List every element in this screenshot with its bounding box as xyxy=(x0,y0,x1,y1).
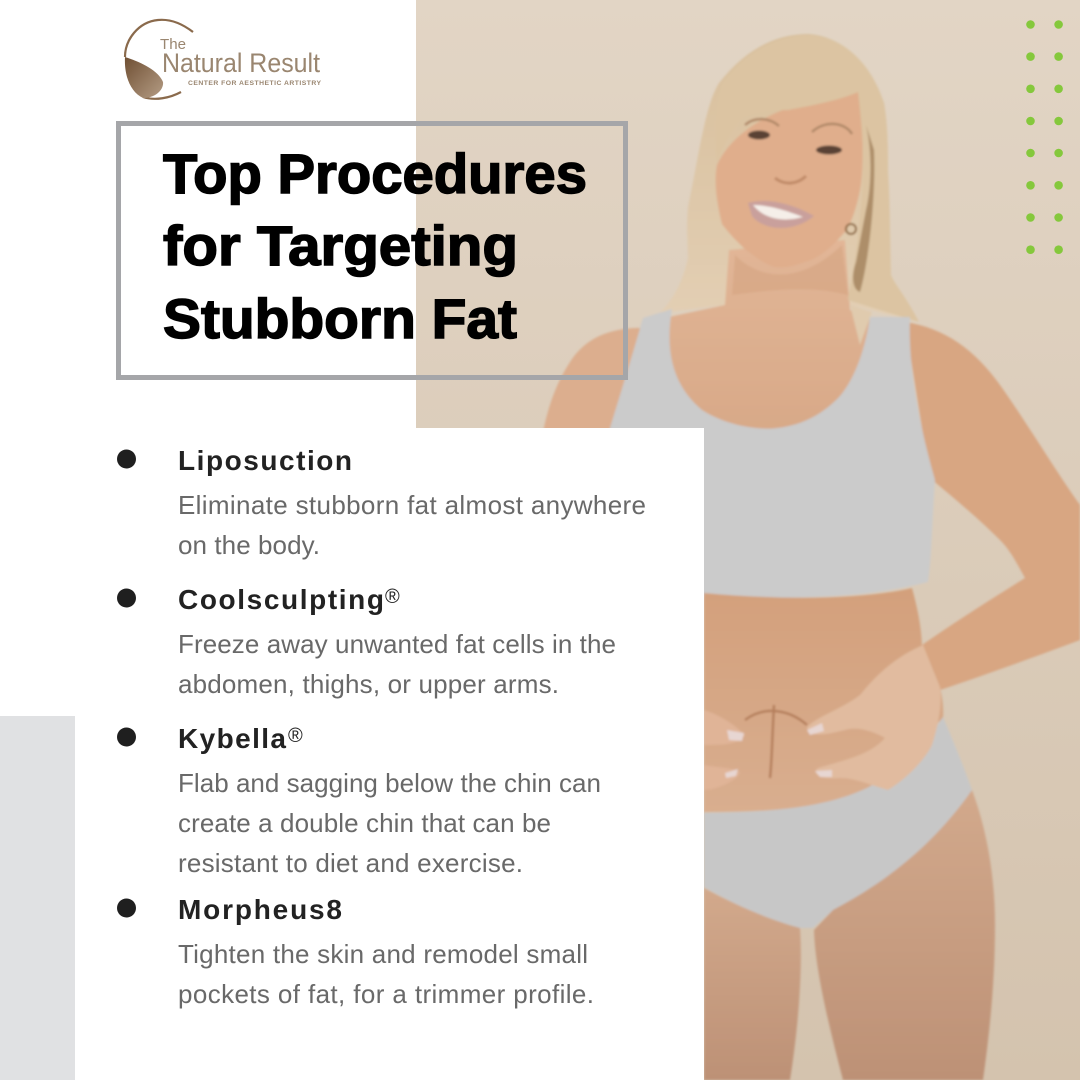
heading: Morpheus8 xyxy=(178,894,342,925)
title: Top Procedures xyxy=(163,142,587,205)
description: resistant to diet and exercise. xyxy=(178,848,523,878)
logo ring xyxy=(125,20,193,99)
bullet xyxy=(117,728,136,746)
item: Morpheus8 xyxy=(117,894,594,1009)
bullet xyxy=(117,450,136,468)
heading: Kybella xyxy=(178,723,286,754)
photo background xyxy=(416,0,1080,1080)
earring xyxy=(846,224,856,234)
smile xyxy=(748,201,814,228)
item: Kybella xyxy=(117,723,601,878)
item: Coolsculpting xyxy=(117,584,616,699)
hair wisp xyxy=(850,305,872,345)
right hand xyxy=(807,645,941,790)
neck and chest xyxy=(655,240,890,430)
logo tagline: CENTER FOR AESTHETIC ARTISTRY xyxy=(188,80,321,87)
logo leaf xyxy=(125,57,163,98)
fingernails xyxy=(725,723,832,778)
description: Flab and sagging below the chin can xyxy=(178,768,601,798)
title xyxy=(163,142,587,350)
description: Freeze away unwanted fat cells in the xyxy=(178,629,616,659)
green dot grid xyxy=(1026,20,1063,254)
description: on the body. xyxy=(178,530,320,560)
white content panel xyxy=(75,428,704,1080)
photo: smiling woman pinching abdomen xyxy=(543,34,1080,1080)
logo wordmark: The xyxy=(160,36,186,53)
logo name: Natural Result xyxy=(162,48,320,78)
midriff xyxy=(704,588,943,812)
hair back xyxy=(660,34,919,322)
description: abdomen, thighs, or upper arms. xyxy=(178,669,559,699)
left hand fingers xyxy=(704,710,745,790)
description: create a double chin that can be xyxy=(178,808,551,838)
face xyxy=(716,92,863,267)
heading: Coolsculpting xyxy=(178,584,384,615)
description: pockets of fat, for a trimmer profile. xyxy=(178,979,594,1009)
white left column xyxy=(0,0,416,716)
light grey corner block xyxy=(0,716,75,1080)
left leg xyxy=(704,888,801,1080)
registered mark: ® xyxy=(288,725,303,747)
right upper arm and forearm xyxy=(905,322,1080,690)
bullet xyxy=(117,898,136,918)
underwear xyxy=(704,717,972,928)
description: Eliminate stubborn fat almost anywhere xyxy=(178,490,646,520)
registered mark: ® xyxy=(385,586,400,608)
bullet xyxy=(117,588,136,608)
hair inner shadow xyxy=(853,125,874,292)
navel fold xyxy=(745,705,807,778)
logo: The Natural Result xyxy=(125,20,321,99)
title: for Targeting xyxy=(163,214,518,277)
title frame xyxy=(118,124,626,378)
item: Liposuction xyxy=(117,445,646,560)
tank top xyxy=(610,309,935,598)
description: Tighten the skin and remodel small xyxy=(178,939,588,969)
hair bangs xyxy=(716,35,919,322)
right leg xyxy=(814,790,995,1080)
eyes and brows xyxy=(745,119,852,154)
title: Stubborn Fat xyxy=(163,287,517,350)
heading: Liposuction xyxy=(178,445,352,476)
left arm xyxy=(543,328,640,432)
neck shadow xyxy=(732,245,848,295)
nose xyxy=(775,176,806,183)
